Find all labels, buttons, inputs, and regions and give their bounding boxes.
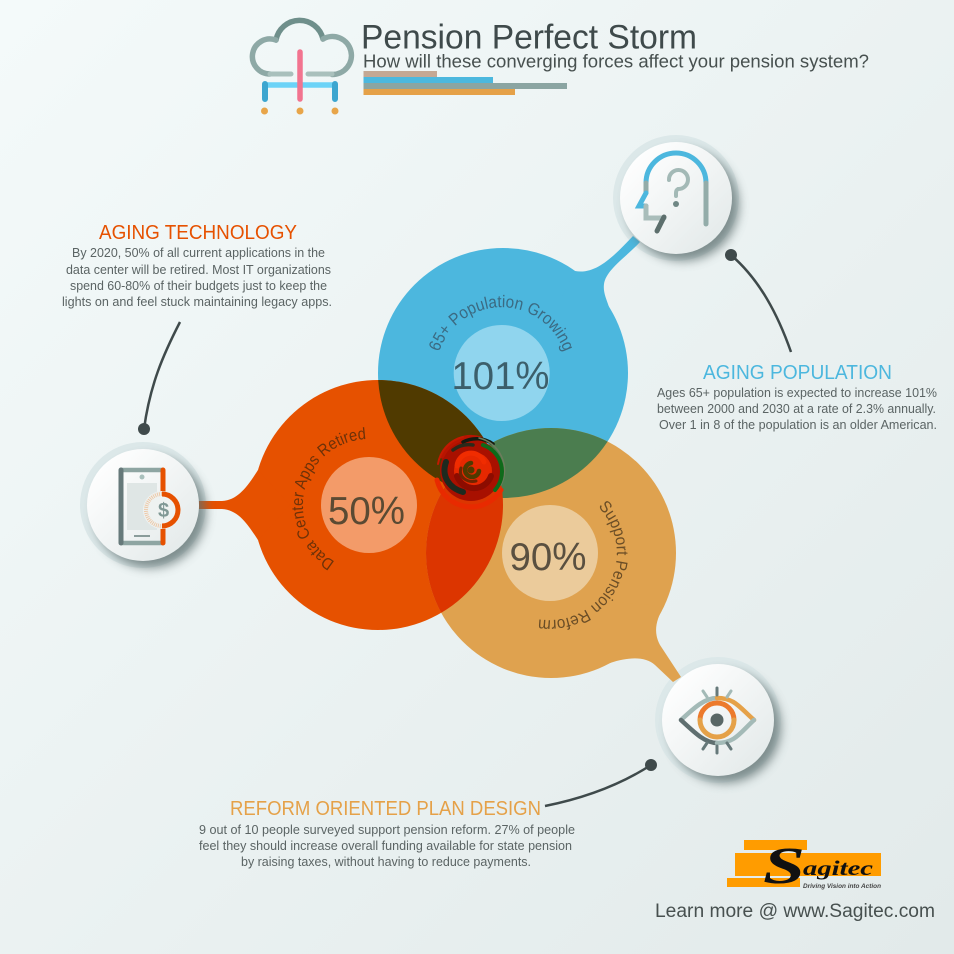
text: aging population: between 2000 and 2030 at a rate of 2.3% annually. xyxy=(657,402,936,416)
tan bubble xyxy=(426,428,681,682)
header icon: cloud xyxy=(252,20,351,115)
heading: reform oriented plan design: REFORM ORIENTED PLAN DESIGN xyxy=(230,798,541,820)
title: Pension Perfect Storm xyxy=(361,18,697,56)
curved label: blue: 65+ Population Growing xyxy=(429,294,572,352)
header colour bars xyxy=(364,71,567,95)
text: reform oriented plan design: 9 out of 10 people surveyed support pension reform. 27% of people xyxy=(199,823,575,837)
overlap: orange and tan xyxy=(426,486,503,613)
blue bubble xyxy=(378,236,640,498)
text: aging technology: lights on and feel stuck maintaining legacy apps. xyxy=(62,295,332,309)
heading: aging population: AGING POPULATION xyxy=(703,362,892,384)
icon: eye xyxy=(662,664,781,783)
stat: 90%: 90% xyxy=(510,536,586,579)
icon: head with question mark xyxy=(620,142,739,261)
arrow: aging technology xyxy=(138,322,180,435)
stat: 50% xyxy=(321,457,417,553)
logo: Sagitec: S xyxy=(763,838,805,895)
text: aging technology: By 2020, 50% of all current applications in the xyxy=(72,246,325,260)
text: aging technology xyxy=(62,246,332,309)
text: reform oriented plan design: by raising taxes, without having to reduce payments. xyxy=(241,855,531,869)
stat: 50%: 50% xyxy=(328,490,405,533)
subtitle: How will these converging forces affect your pension system? xyxy=(363,50,869,72)
stat: 101%: 101% xyxy=(452,355,550,398)
venn diagram xyxy=(199,236,681,682)
logo: Sagitec: agitec xyxy=(803,856,874,880)
stat: 101% xyxy=(452,325,550,421)
overlap: blue and tan xyxy=(488,428,608,498)
center swirl xyxy=(437,437,505,507)
text: aging technology: spend 60-80% of their budgets just to keep the xyxy=(70,279,327,293)
icon: phone with dollar coin xyxy=(87,449,206,568)
heading: aging technology: AGING TECHNOLOGY xyxy=(99,222,297,244)
curved label: tan: Support Pension Reform xyxy=(539,501,628,630)
orange bubble xyxy=(199,380,503,630)
overlap: blue and orange xyxy=(378,380,487,482)
website link text: Learn more @ www.Sagitec.com xyxy=(655,901,935,922)
logo: Sagitec xyxy=(727,838,881,895)
text: aging population: Ages 65+ population is expected to increase 101% xyxy=(657,386,937,400)
curved label: orange: Data Center Apps Retired xyxy=(292,427,366,570)
icon rings behind the bubble tails xyxy=(80,135,781,783)
stat: 90% xyxy=(502,505,598,601)
arrow: aging population xyxy=(725,249,791,352)
text: aging population: Over 1 in 8 of the population is an older American. xyxy=(659,418,937,432)
text: aging population xyxy=(657,386,937,432)
icon: phone with dollar coin: $ xyxy=(158,500,169,522)
text: reform oriented plan design xyxy=(199,823,575,869)
logo: Sagitec: Driving Vision into Action xyxy=(803,883,881,890)
text: aging technology: data center will be retired. Most IT organizations xyxy=(66,263,331,277)
arrow: reform plan design xyxy=(545,759,657,806)
text: reform oriented plan design: feel they should increase overall funding available for state pension xyxy=(199,839,572,853)
